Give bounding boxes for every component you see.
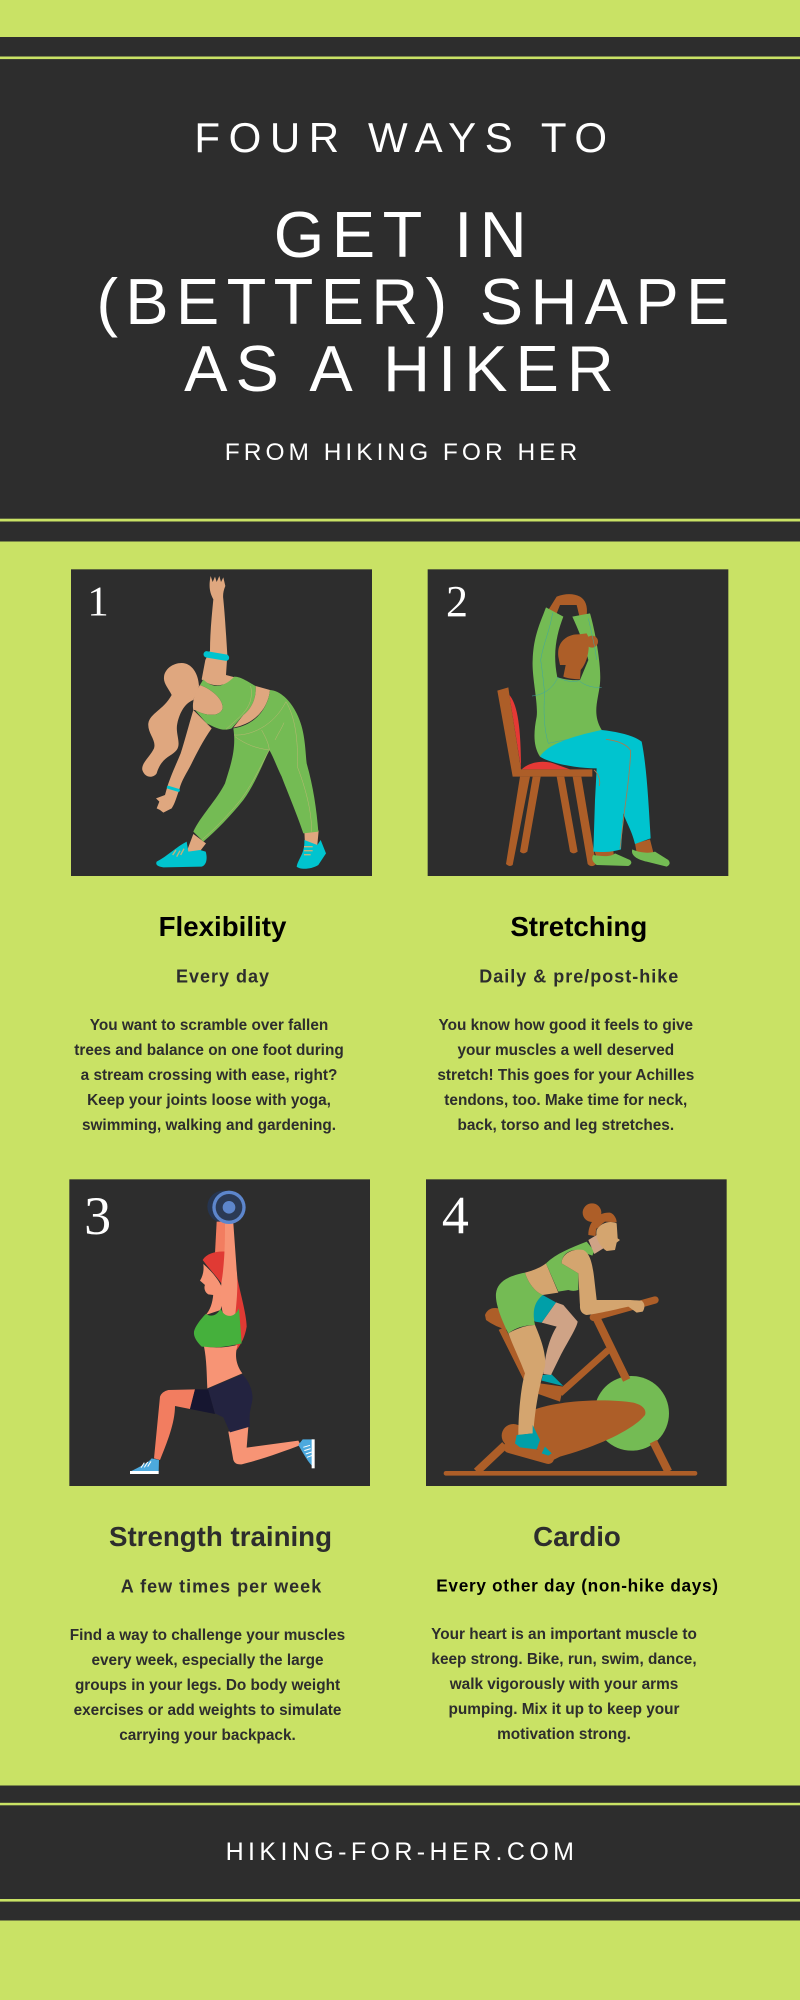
heading: Cardio [533, 1521, 621, 1552]
body text: walk vigorously with your arms [449, 1676, 678, 1693]
title: AS A HIKER [184, 332, 622, 405]
title: GET IN [274, 198, 534, 271]
dumbbell weight [212, 1191, 246, 1224]
header banner [0, 37, 800, 542]
panel: cardio [426, 1179, 727, 1743]
footer url: HIKING-FOR-HER.COM [226, 1838, 578, 1866]
body text [431, 1626, 697, 1743]
frequency: Every day [176, 966, 270, 986]
illustration card 1 [71, 569, 372, 876]
body text: your muscles a well deserved [457, 1042, 674, 1059]
panel: flexibility [71, 569, 372, 1134]
figure: seated stretch on chair [497, 594, 670, 867]
body text [74, 1017, 344, 1134]
panel: stretching [428, 569, 728, 1134]
subtitle: from hiking for her: FROM HIKING FOR HER [225, 439, 581, 466]
number 1: 1 [87, 579, 109, 626]
body text: pumping. Mix it up to keep your [448, 1701, 680, 1718]
body text: back, torso and leg stretches. [458, 1117, 674, 1134]
illustration card 2 [428, 569, 728, 876]
title [96, 198, 737, 405]
body text: every week, especially the large [91, 1652, 324, 1669]
body text: carrying your backpack. [119, 1727, 296, 1744]
heading: Stretching [510, 911, 647, 942]
frequency: Every other day (non-hike days) [436, 1576, 719, 1596]
body text: motivation strong. [497, 1726, 631, 1743]
frequency: A few times per week [121, 1576, 322, 1596]
body text: Keep your joints loose with yoga, [87, 1092, 331, 1109]
number 3: 3 [84, 1186, 111, 1246]
body text: a stream crossing with ease, right? [81, 1067, 337, 1084]
body text: Your heart is an important muscle to [431, 1626, 697, 1643]
figure: woman on exercise bike [446, 1203, 695, 1473]
body text [70, 1627, 345, 1744]
body text: You want to scramble over fallen [90, 1017, 328, 1034]
footer banner [0, 1786, 800, 1920]
title: (BETTER) SHAPE [96, 265, 737, 338]
figure: overhead lunge with weight [130, 1191, 315, 1474]
figure: triangle pose stretch [142, 576, 326, 869]
body text: trees and balance on one foot during [74, 1042, 344, 1059]
heading: Flexibility [159, 911, 287, 942]
body text: exercises or add weights to simulate [74, 1702, 342, 1719]
frequency: Daily & pre/post-hike [479, 966, 679, 986]
illustration card 4 [426, 1179, 727, 1486]
panel: strength training [69, 1179, 370, 1744]
number 2: 2 [446, 577, 468, 626]
body text: swimming, walking and gardening. [82, 1117, 336, 1134]
body text [437, 1017, 694, 1134]
body text: stretch! This goes for your Achilles [437, 1067, 694, 1084]
body text: Find a way to challenge your muscles [70, 1627, 345, 1644]
kicker: four ways to: FOUR WAYS TO [194, 114, 616, 161]
number 4: 4 [442, 1186, 469, 1246]
body text: You know how good it feels to give [438, 1017, 694, 1034]
illustration card 3 [69, 1179, 370, 1486]
body text: keep strong. Bike, run, swim, dance, [431, 1651, 697, 1668]
body text: tendons, too. Make time for neck, [444, 1092, 687, 1109]
heading: Strength training [109, 1521, 332, 1552]
body text: groups in your legs. Do body weight [75, 1677, 340, 1694]
